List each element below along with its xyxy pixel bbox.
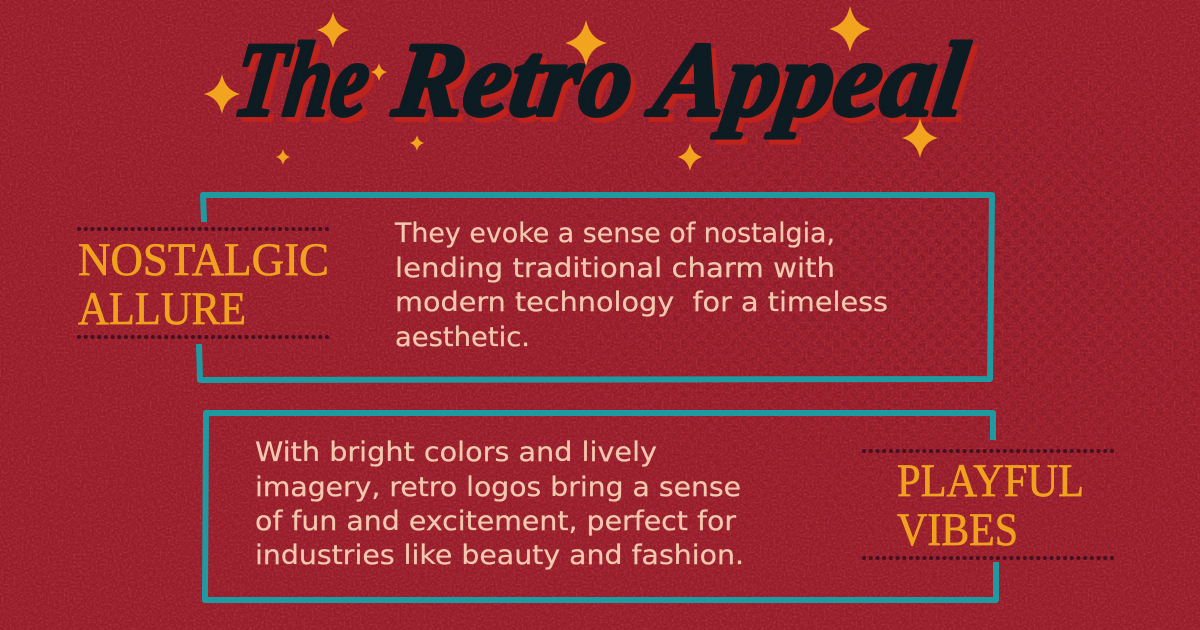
text block: nostalgia description: They evoke a sense of nostalgia, bbox=[394, 218, 835, 249]
dotted rules bbox=[864, 451, 1116, 558]
text block: nostalgia description: lending traditional charm with bbox=[395, 253, 835, 284]
title: The bbox=[228, 21, 377, 139]
heading: playful vibes bbox=[897, 455, 1084, 556]
panel: nostalgic allure bbox=[78, 195, 992, 380]
title: Appeal bbox=[642, 21, 975, 139]
text block: nostalgia description: aesthetic. bbox=[395, 322, 530, 353]
dotted rules bbox=[79, 229, 332, 337]
text block: playful description: of fun and excitement, perfect for bbox=[255, 506, 737, 537]
teal frame bottom bbox=[205, 413, 996, 600]
text block: nostalgia description bbox=[394, 218, 888, 353]
text block: playful description bbox=[255, 437, 744, 571]
title: Retro bbox=[387, 21, 641, 139]
icon: sparkle stars bbox=[204, 6, 938, 171]
heading: playful vibes: VIBES bbox=[897, 504, 1018, 556]
heading: nostalgic allure: ALLURE bbox=[78, 283, 246, 335]
heading: nostalgic allure bbox=[78, 234, 329, 335]
text block: playful description: imagery, retro logos bring a sense bbox=[255, 472, 741, 503]
text block: playful description: With bright colors and lively bbox=[255, 437, 657, 468]
text block: nostalgia description: modern technology for a timeless bbox=[395, 287, 888, 318]
heading: nostalgic allure: NOSTALGIC bbox=[78, 234, 329, 286]
heading: playful vibes: PLAYFUL bbox=[897, 455, 1084, 507]
panel: playful vibes bbox=[205, 413, 1116, 600]
teal frame top bbox=[199, 195, 992, 380]
text block: playful description: industries like beauty and fashion. bbox=[255, 540, 744, 571]
title bbox=[228, 21, 975, 139]
